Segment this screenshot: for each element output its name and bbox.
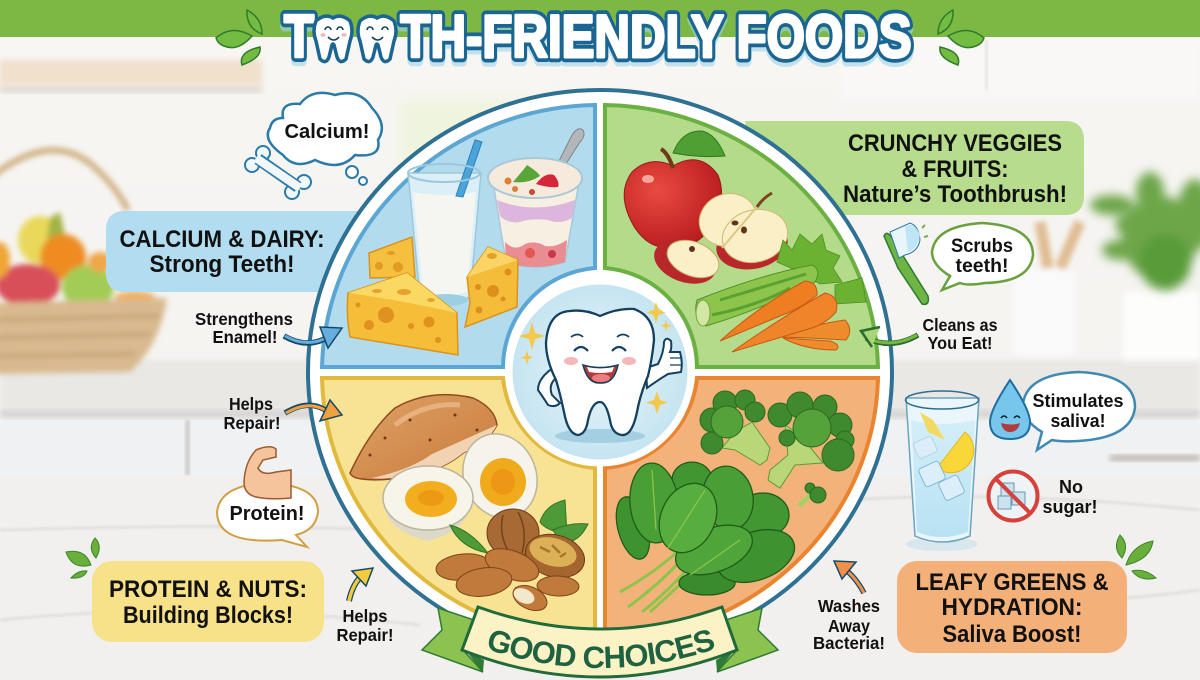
title: TOOTH-FRIENDLY FOODS — [284, 6, 912, 74]
callout: scrubs teeth: teeth! — [956, 256, 1008, 277]
icon: bone — [245, 146, 311, 199]
panel: crunchy label: Nature’s Toothbrush! — [843, 181, 1067, 208]
icon: no sugar — [988, 472, 1038, 520]
quadrant: dairy — [322, 105, 595, 367]
arrow: helps repair lower — [349, 568, 373, 601]
title letter fill: TOOTH-FRIENDLY FOODS — [284, 2, 912, 70]
background: plant and jars — [1013, 172, 1200, 360]
panel: leafy greens label — [897, 561, 1127, 653]
icon: water glass with lemon — [906, 391, 979, 551]
note: helps repair lower: Repair! — [336, 625, 394, 645]
callout: stimulates saliva — [1023, 372, 1135, 450]
sparkles — [519, 302, 672, 414]
icon: flexed arm — [244, 447, 291, 499]
panel: calcium label: Strong Teeth! — [150, 251, 294, 278]
panel: crunchy label — [745, 121, 1084, 215]
icon: smiling tooth letter two — [358, 16, 396, 62]
icon: tooth mascot — [519, 302, 682, 443]
panel: crunchy label: & FRUITS: — [902, 156, 1008, 183]
icon: title leaves right — [938, 10, 984, 65]
icon: leaves leafy label — [1116, 535, 1156, 579]
food: milk glass — [408, 140, 482, 306]
note: washes away bacteria: Bacteria! — [813, 633, 885, 653]
note: strengthens enamel — [195, 309, 293, 347]
food: carrots — [720, 281, 850, 352]
callout: stimulates saliva: saliva! — [1050, 411, 1106, 431]
food: chicken breast — [350, 395, 497, 480]
arrow: to protein — [285, 400, 342, 421]
panel: protein label — [92, 561, 324, 642]
icon: toothbrush — [884, 223, 928, 304]
food: cheese right — [465, 247, 518, 327]
panel: crunchy label: CRUNCHY VEGGIES — [848, 130, 1062, 157]
panel: protein label: PROTEIN & NUTS: — [109, 576, 307, 603]
panel: calcium label: CALCIUM & DAIRY: — [120, 226, 324, 253]
callout: scrubs teeth: Scrubs — [951, 236, 1013, 257]
quadrant: crunchy — [605, 105, 878, 367]
panel: calcium label — [106, 211, 360, 292]
plate: outer ring — [308, 90, 892, 654]
callout: protein bubble: Protein! — [230, 503, 304, 525]
note: helps repair lower — [336, 606, 394, 645]
food: broccoli — [700, 390, 854, 506]
note: no sugar — [1042, 477, 1098, 517]
food: spinach — [610, 461, 802, 612]
note: cleans as you eat: Cleans as — [922, 315, 998, 335]
panel: protein label: Building Blocks! — [123, 602, 293, 629]
food: apple — [624, 131, 725, 247]
food: cheese back — [369, 237, 415, 278]
food: yogurt cup — [488, 129, 584, 267]
header: green band — [0, 0, 1200, 37]
food: nuts — [435, 500, 589, 616]
callout: calcium thought cloud: Calcium! — [284, 121, 370, 143]
note: washes away bacteria: Away — [828, 616, 870, 636]
note: cleans as you eat — [922, 315, 998, 353]
banner: good choices — [420, 605, 780, 678]
food: apple slices — [648, 186, 794, 292]
panel: leafy greens label: HYDRATION: — [942, 594, 1082, 621]
callout: calcium thought cloud — [268, 93, 382, 185]
quadrant: protein — [322, 378, 595, 640]
centre circle — [509, 281, 691, 463]
icon: water drop mascot — [990, 380, 1030, 439]
icon: smiling tooth letter one — [314, 16, 352, 62]
note: strengthens enamel: Enamel! — [212, 327, 278, 347]
arrow: to crunchy — [861, 327, 918, 347]
panel: leafy greens label: LEAFY GREENS & — [916, 569, 1108, 596]
note: helps repair upper — [224, 394, 280, 433]
callout: stimulates saliva: Stimulates — [1032, 391, 1124, 411]
icon: leaves protein label — [66, 538, 99, 578]
note: helps repair upper: Repair! — [224, 413, 280, 433]
note: cleans as you eat: You Eat! — [928, 333, 992, 353]
food: egg halves — [383, 423, 549, 541]
arrow: to leafy — [834, 561, 864, 593]
background: fruit basket — [0, 150, 167, 374]
arrow: to dairy — [284, 327, 342, 348]
callout: scrubs teeth — [932, 223, 1033, 290]
food: cheese wedge — [347, 273, 458, 355]
panel: leafy greens label: Saliva Boost! — [942, 621, 1082, 648]
banner: good choices: GOOD CHOICES — [488, 630, 714, 668]
note: no sugar: sugar! — [1042, 497, 1098, 517]
note: helps repair upper: Helps — [229, 394, 273, 414]
title: TOOTH-FRIENDLY FOODS — [284, 2, 912, 70]
callout: protein bubble — [217, 483, 318, 547]
food: celery — [696, 234, 866, 326]
note: strengthens enamel: Strengthens — [195, 309, 293, 329]
note: washes away bacteria: Washes — [818, 596, 880, 616]
note: washes away bacteria — [813, 596, 885, 653]
quadrant: leafy — [605, 378, 878, 640]
note: helps repair lower: Helps — [342, 606, 388, 626]
icon: title leaves left — [216, 10, 262, 65]
note: no sugar: No — [1059, 477, 1083, 497]
